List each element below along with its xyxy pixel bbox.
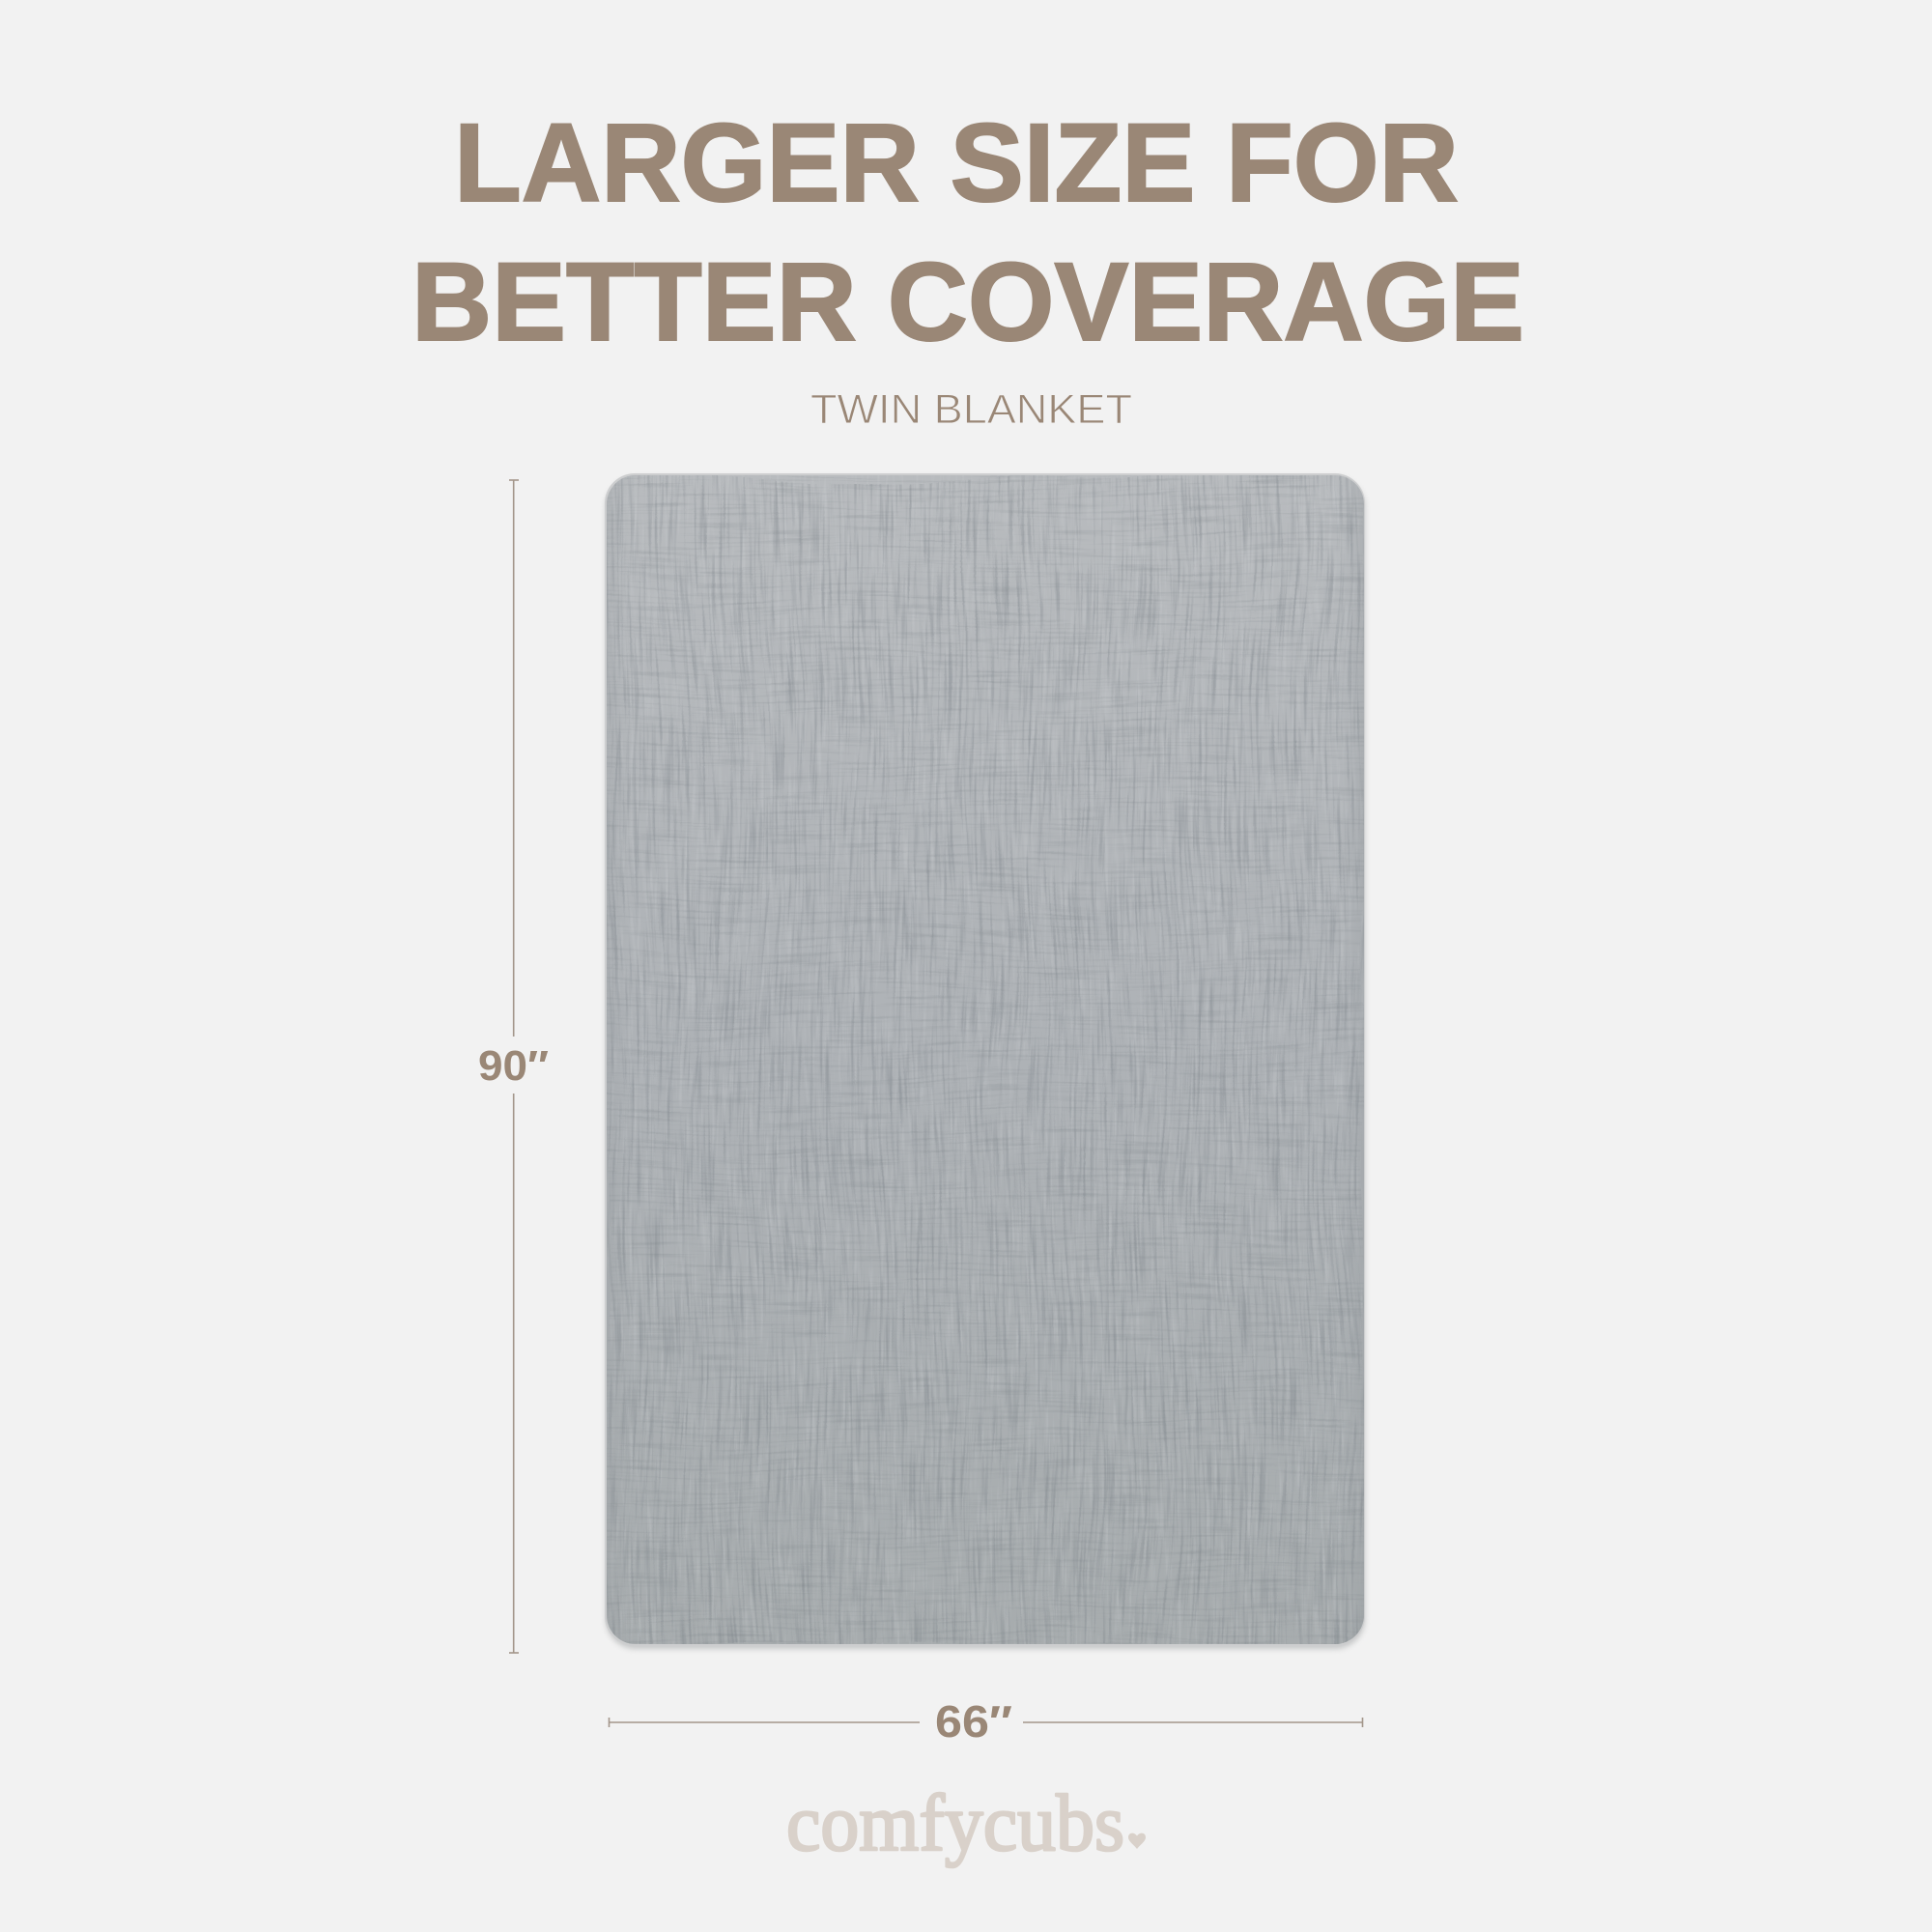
title bbox=[412, 101, 1524, 364]
blanket bbox=[605, 473, 1365, 1649]
icon: heart bbox=[1128, 1833, 1146, 1849]
logo wordmark: comfycubs bbox=[786, 1778, 1124, 1868]
title line 1: LARGER SIZE FOR bbox=[454, 101, 1459, 225]
subtitle: TWIN BLANKET bbox=[810, 386, 1132, 433]
logo bbox=[786, 1778, 1146, 1868]
label: 90 inches: 90″ bbox=[478, 1042, 549, 1090]
label: 66 inches: 66″ bbox=[935, 1696, 1012, 1747]
title line 2: BETTER COVERAGE bbox=[412, 241, 1524, 364]
